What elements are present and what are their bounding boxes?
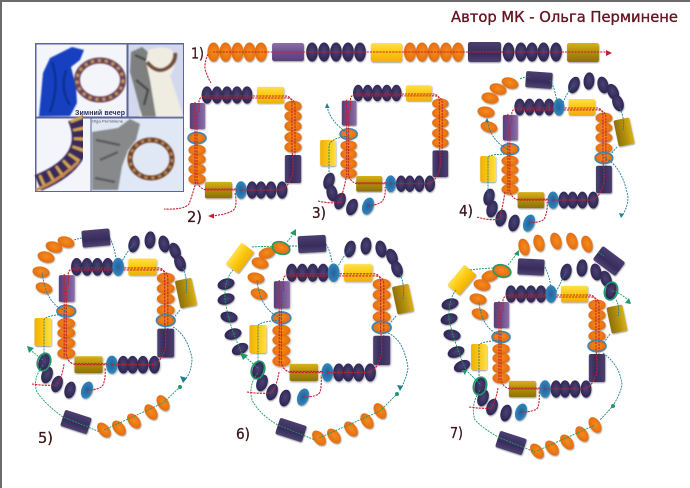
- green ring bead: [35, 351, 53, 373]
- step 3: [312, 85, 449, 222]
- photo: rope necklace close-up: [36, 118, 90, 191]
- bead square: [501, 99, 612, 209]
- photo: blue scarf with necklace: Зимний вечер: [75, 109, 125, 117]
- label 4): 4): [459, 202, 473, 220]
- threads: [225, 229, 408, 440]
- step 2: [164, 54, 302, 226]
- label 6): 6): [236, 425, 250, 443]
- thread: [164, 54, 236, 218]
- bead row: [207, 42, 599, 62]
- coloured accents: [545, 285, 606, 352]
- bead square: [188, 86, 302, 199]
- label 1): 1): [191, 44, 204, 62]
- photo: grey scarf with necklace: Olga Perminiene: [92, 118, 124, 124]
- step 4: [459, 71, 635, 233]
- label 2): 2): [187, 208, 202, 226]
- photo: grey scarf with necklace: [92, 118, 183, 191]
- bead square: [340, 85, 449, 192]
- photo: blue scarf with necklace: [36, 44, 126, 117]
- thread with arrow: [213, 50, 612, 56]
- step 5: [27, 228, 197, 447]
- step 1: strung row: [191, 42, 612, 62]
- outer beads: [216, 235, 414, 448]
- threads: [449, 250, 631, 452]
- green ring beads: [471, 263, 620, 396]
- label 7): 7): [450, 424, 463, 442]
- threads: [477, 77, 628, 223]
- outer beads: [439, 231, 628, 461]
- photo: grey scarf on bust: [128, 44, 183, 116]
- threads: [27, 238, 192, 432]
- label 5): 5): [38, 429, 53, 447]
- coloured accents: [553, 98, 613, 163]
- bead square: [492, 285, 606, 398]
- threads: [318, 103, 385, 206]
- label 3): 3): [312, 204, 326, 222]
- outer beads: [477, 71, 635, 233]
- step 7: [439, 231, 631, 461]
- title: Автор МК - Ольга Перминене: [451, 8, 678, 26]
- outer beads: [320, 140, 376, 217]
- step 6: [216, 229, 414, 448]
- coloured accents: [112, 258, 175, 326]
- green ring beads: [249, 240, 291, 381]
- photo collage: [35, 43, 184, 192]
- coloured accents: [328, 264, 391, 333]
- outer beads: [32, 228, 197, 440]
- bead square: [272, 264, 391, 382]
- bead square: [57, 258, 175, 374]
